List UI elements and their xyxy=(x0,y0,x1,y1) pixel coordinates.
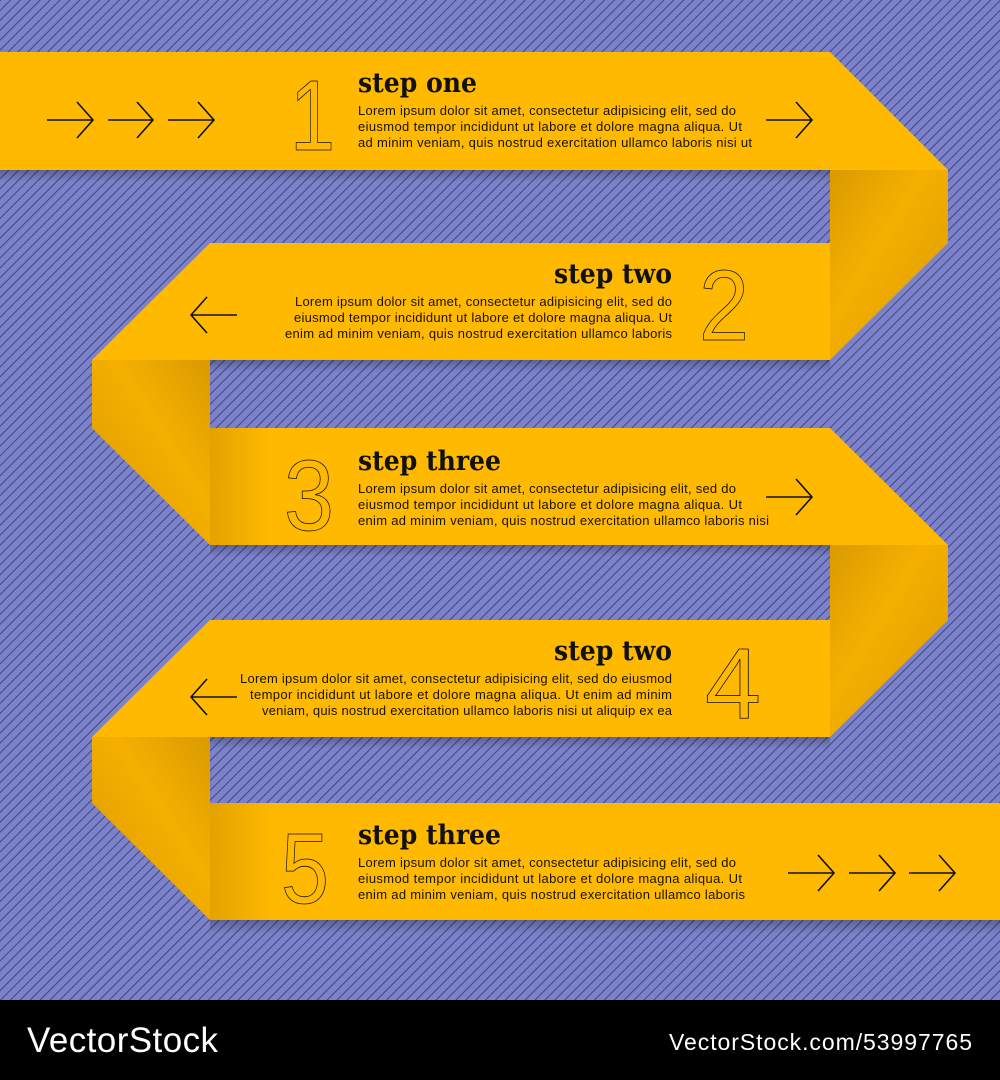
body: enim ad minim veniam, quis nostrud exercitation ullamco laboris nisi xyxy=(358,513,769,528)
title: step three xyxy=(358,820,501,851)
body xyxy=(240,671,673,718)
band 5 xyxy=(210,803,1000,925)
number 1: 1 xyxy=(290,60,335,172)
number 3: 3 xyxy=(284,440,334,552)
body xyxy=(358,103,752,150)
shadows xyxy=(0,170,1000,934)
body: Lorem ipsum dolor sit amet, consectetur adipisicing elit, sed do xyxy=(295,294,672,309)
fold: left 1 xyxy=(92,360,210,545)
title: step two xyxy=(554,259,672,290)
body: eiusmod tempor incididunt ut labore et dolore magna aliqua. Ut xyxy=(358,119,742,134)
body: ad minim veniam, quis nostrud exercitation ullamco laboris nisi ut xyxy=(358,135,752,150)
footer xyxy=(0,1000,1000,1080)
title: step two xyxy=(554,636,672,667)
body: enim ad minim veniam, quis nostrud exercitation ullamco laboris xyxy=(358,887,746,902)
arrow xyxy=(191,297,237,333)
fold: left 2 xyxy=(92,737,210,920)
body: veniam, quis nostrud exercitation ullamco laboris nisi ut aliquip ex ea xyxy=(262,703,673,718)
number 4: 4 xyxy=(705,628,761,740)
body: eiusmod tempor incididunt ut labore et dolore magna aliqua. Ut xyxy=(358,871,742,886)
body: Lorem ipsum dolor sit amet, consectetur adipisicing elit, sed do xyxy=(358,855,736,870)
body: Lorem ipsum dolor sit amet, consectetur adipisicing elit, sed do xyxy=(358,103,736,118)
title: step one xyxy=(358,68,477,99)
band 3 xyxy=(210,428,948,552)
body: enim ad minim veniam, quis nostrud exercitation ullamco laboris xyxy=(285,326,672,341)
fold: right 1 xyxy=(830,170,948,360)
fold: right 2 xyxy=(830,545,948,737)
body xyxy=(285,294,672,341)
number 5: 5 xyxy=(281,813,329,925)
body: eiusmod tempor incididunt ut labore et dolore magna aliqua. Ut xyxy=(358,497,742,512)
arrows xyxy=(47,102,812,138)
band 1 xyxy=(0,52,948,172)
footer: VectorStock.com/53997765 xyxy=(669,1029,972,1055)
body: eiusmod tempor incididunt ut labore et dolore magna aliqua. Ut xyxy=(294,310,672,325)
band 4 xyxy=(92,620,830,740)
body xyxy=(358,855,746,902)
footer: VectorStock xyxy=(27,1021,218,1060)
title: step three xyxy=(358,446,501,477)
body xyxy=(358,481,769,528)
band 2 xyxy=(92,243,830,362)
body: tempor incididunt ut labore et dolore magna aliqua. Ut enim ad minim xyxy=(250,687,672,702)
body: Lorem ipsum dolor sit amet, consectetur adipisicing elit, sed do eiusmod xyxy=(240,671,672,686)
body: Lorem ipsum dolor sit amet, consectetur adipisicing elit, sed do xyxy=(358,481,736,496)
number 2: 2 xyxy=(699,250,749,362)
